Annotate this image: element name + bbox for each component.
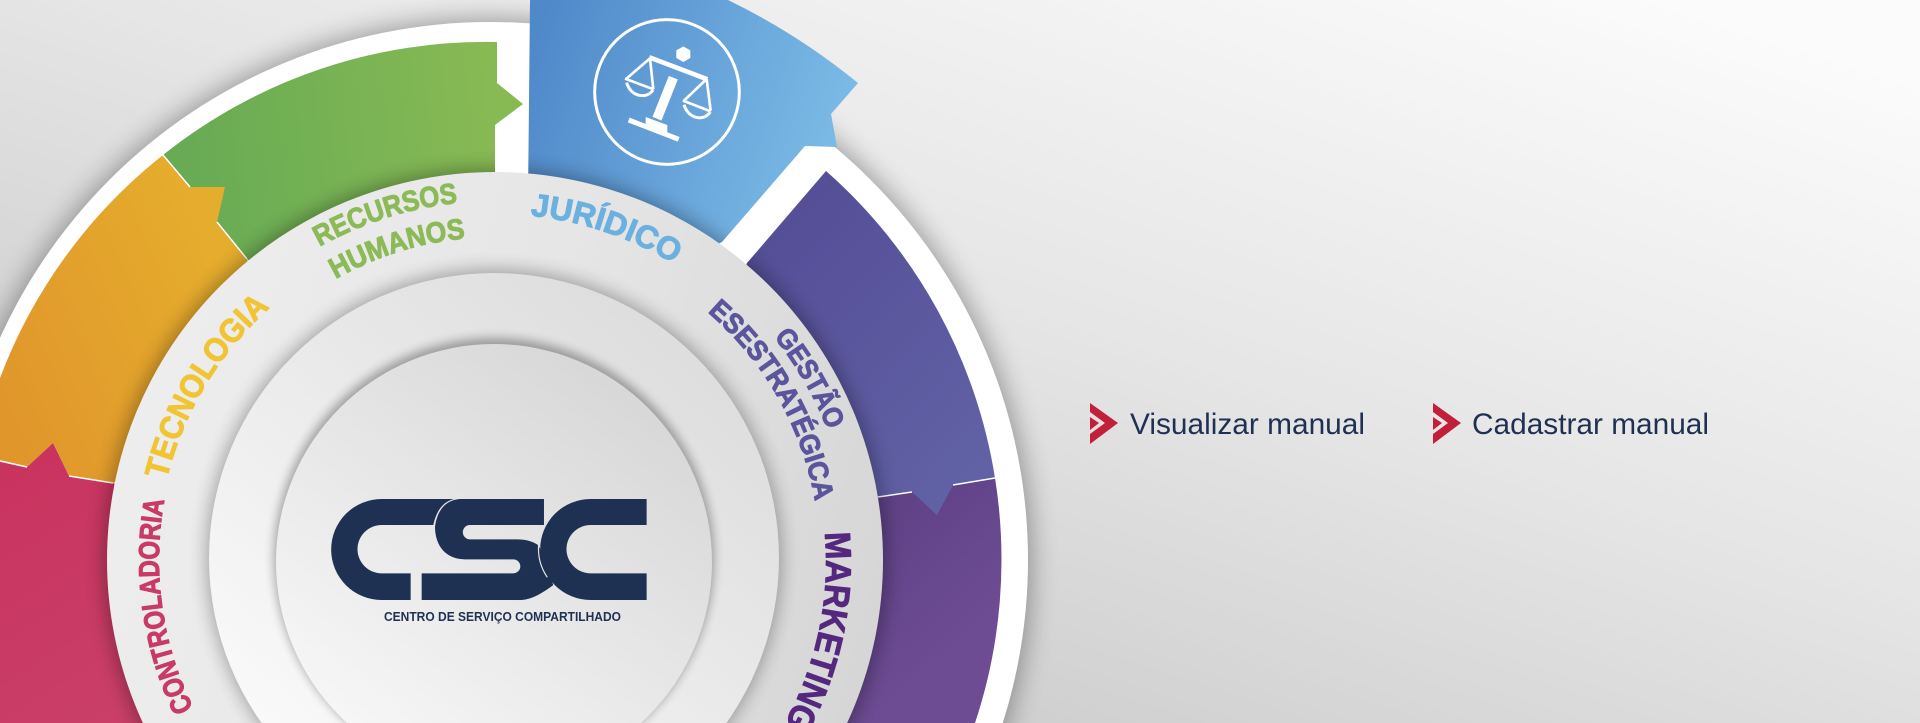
sector: marketing (purple)	[700, 478, 1001, 723]
sector: jurídico (blue, raised)	[527, 0, 858, 300]
middle ring shadow	[207, 270, 781, 723]
icon: red chevron	[1090, 403, 1118, 444]
label: recursos: RECURSOS	[311, 183, 457, 246]
sector: gestão estratégica (indigo)	[700, 171, 995, 515]
sector: controladoria (pink)	[0, 443, 300, 723]
inner disc	[276, 344, 712, 723]
sector: recursos humanos (green)	[163, 42, 523, 300]
link text: Cadastrar manual	[1472, 408, 1709, 441]
wheel outer shadow	[0, 19, 1031, 723]
logo: CSC	[331, 499, 647, 624]
label: controladoria: CONTROLADORIA	[138, 500, 192, 714]
sector: tecnologia (orange)	[0, 155, 300, 483]
icon: red chevron	[1433, 403, 1461, 444]
gray label ring	[107, 172, 883, 723]
gray ring shadow on sectors	[103, 168, 887, 723]
label: esestratégica: ESESTRATÉGICA	[708, 298, 834, 502]
logo subtitle: CENTRO DE SERVIÇO COMPARTILHADO	[384, 609, 621, 624]
link text: Visualizar manual	[1130, 408, 1365, 441]
label: humanos: HUMANOS	[327, 218, 464, 279]
wheel white base disc	[0, 22, 1028, 723]
icon: scales of justice	[595, 20, 739, 164]
label: tecnologia: TECNOLOGIA	[144, 296, 270, 475]
link: visualizar manual	[1090, 403, 1365, 444]
label: jurídico: JURÍDICO	[531, 194, 681, 260]
label: gestão: GESTÃO	[777, 328, 844, 427]
middle ring	[209, 273, 779, 723]
link: cadastrar manual	[1433, 403, 1709, 444]
inner disc shadow	[274, 338, 714, 723]
